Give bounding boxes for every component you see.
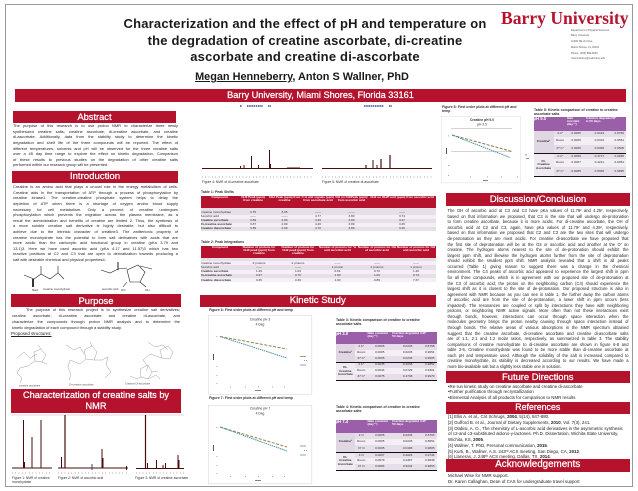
discussion text: through bonds, however, interactions can occur through space interaction when the <box>448 314 628 319</box>
chart: figure 7 first order plot: Creatine pH 7 <box>250 406 270 410</box>
table 4: kinetic comparison pH 7.4: 0.0005 <box>375 433 385 437</box>
table 3: kinetic comparison pH 3.0: 0.0005 <box>375 356 385 360</box>
kinetic study heading: Kinetic Study <box>290 295 346 306</box>
table 3: kinetic comparison pH 3.0: 0.0005 <box>375 350 385 354</box>
table 5: kinetic comparison pH 9.0: 0.0067 <box>571 160 581 164</box>
authors: Megan Henneberry, Anton S Wallner, PhD <box>195 71 409 83</box>
title: the degradation of creatine ascorbate, di-creatine <box>148 33 462 48</box>
department contact details: Miami Shores, FL 33161 <box>571 46 599 49</box>
table 2 title: Table 2: Peak Integrations <box>201 240 244 244</box>
future directions list: •Elemental Analysis of all products for comparison to NMR results <box>448 395 575 400</box>
discussion text: of ascorbic acid are from the site of de-protonation, a lower shift in ppm occurs (less <box>448 297 628 302</box>
structures: creatine monohydrate and ascorbic acid: ascorbic acid <box>102 287 119 291</box>
table 5: kinetic comparison pH 9.0: 4 C° <box>557 154 563 158</box>
heading: discussion/conclusion <box>446 193 630 206</box>
table 5: kinetic comparison pH 9.0: 0.0085 <box>571 169 581 173</box>
purpose text: kinetic degradation of each compound through a stability study. <box>12 325 122 330</box>
table 3: kinetic comparison pH 3.0: Di- <box>343 365 347 369</box>
table 4: kinetic comparison pH 7.4: 0.9848 <box>425 458 435 462</box>
discussion text: largest ppm shift, and likewise the hydrogen atoms further from the site of deprotonation <box>448 253 628 258</box>
table 3: kinetic comparison pH 3.0: 37 C° <box>357 356 365 360</box>
discussion text: based on that information we proposed that C2 and C3 are the two sites that will undergo <box>448 230 628 235</box>
table 4: kinetic comparison pH 7.4: 37 O <box>358 446 365 450</box>
table 4: kinetic comparison pH 7.4: 0.0498 <box>403 446 412 450</box>
introduction text: depletion of ATP when there is a shortage of oxygen and/or blood supply <box>13 201 178 206</box>
table 5 title: Table 5: Kinetic comparison of creatine to creatine ascorbate salts <box>534 108 618 116</box>
table 4: kinetic comparison pH 7.4: 0.0005 <box>375 439 385 443</box>
introduction text: 13.1)3. Here we have used ascorbic acid (pKa 4.17 and 11.57)3 which has two <box>13 246 178 251</box>
discussion text: are of 1:1, 2:1 and 1:2 molar ratios, respectively, as summarized in table 3. The stability <box>448 336 628 341</box>
discussion text: protons, or neighboring NMR active signals. More often than not these interactions exist <box>448 308 628 313</box>
introduction text: creatine kinase1. The creatine-creatine phosphate system helps to delay the <box>13 195 178 200</box>
structures: creatine monohydrate and ascorbic acid: creatine monohydrate <box>43 287 70 291</box>
proposed structures label: Proposed structures: <box>11 331 52 336</box>
abstract text: synthesized creatine salts; creatine ascorbate, di-creatine ascorbate, and creatine <box>13 129 178 134</box>
table 4: kinetic comparison pH 7.4: 0.0079 <box>375 458 385 462</box>
reference list: [2] Gufford B. et al., Journal of Dietary Supplements, 2010, Vol. 7(3), 241. <box>448 420 590 425</box>
introduction text: necessary for cell metabolism. Only a percent of creatine undergoes <box>13 207 178 212</box>
figure 7 title: Figure 7: First order plots at different pH and temp <box>209 396 293 400</box>
table 3: kinetic comparison pH 3.0: Ascorbate <box>338 372 353 376</box>
discussion text: should exhibit the smallest ppm shift. NMR analysis revealed that a shift in all peaks <box>448 258 628 263</box>
table 3: kinetic comparison pH 3.0: 0.0245 <box>403 356 412 360</box>
panel: future directions <box>446 371 630 400</box>
discussion text: creatine. The hydrogen atoms nearest to the site of de-protonation should exhibit the <box>448 247 628 252</box>
discussion text: table 3-6. Creatine monohydrate was found to be more stable than di-creatine ascorbate at <box>448 347 628 352</box>
table 5: kinetic comparison pH 9.0: Di- <box>542 159 546 163</box>
chart: figure 6 first order plot <box>208 315 312 394</box>
table 5: kinetic comparison pH 9.0: 0.9895 <box>615 169 624 173</box>
introduction text: salt with desirable chemical and physical properties4. <box>13 257 106 262</box>
department contact details: 11300 NE 2nd Ave <box>571 40 592 43</box>
heading: acknowledgements <box>446 459 630 472</box>
table 3: kinetic comparison pH 3.0: 0.9301 <box>425 368 435 372</box>
department contact details: Barry University <box>571 34 589 37</box>
table 5: kinetic comparison pH 9.0: 0.9951 <box>615 160 624 164</box>
reference list <box>448 414 623 459</box>
figure 8 title: Figure 8: First order plots at different pH and temp <box>442 105 516 113</box>
table 3: kinetic comparison pH 3.0: 0.9852 <box>425 362 435 366</box>
table 4: kinetic comparison pH 7.4: 0.8765 <box>425 433 435 437</box>
caption: figure 3: Figure 3: NMR of creatine ascorbate <box>135 476 188 480</box>
heading: future directions <box>446 371 630 383</box>
chart: figure 6 first order plot: 4 Deg <box>256 322 265 326</box>
discussion text: de-protonation as they are most acidic. For creatine di-ascorbate we have proposed that <box>448 236 628 241</box>
table 3: kinetic comparison pH 3.0: 0.0044 <box>375 368 385 372</box>
caption: figure 1: Figure 1: NMR of creatine <box>12 476 50 480</box>
panel: abstract <box>13 111 178 167</box>
table 3: kinetic comparison pH 3.0: Room <box>357 350 365 354</box>
table 5: kinetic comparison pH 9.0: 0.0319 <box>595 138 604 142</box>
table 4: kinetic comparison pH 7.4: 0.4026 <box>403 453 412 457</box>
heading: characterization by NMR <box>11 389 181 413</box>
affiliation banner: Barry University, Miami Shores, Florida 33161 <box>227 90 414 100</box>
purpose text: characterize the compounds through proton NMR analysis and to determine the <box>12 319 180 324</box>
heading: characterization by NMR: Characterization of creatine salts by <box>23 390 169 400</box>
introduction text: a more soluble creatine salt derivative is highly desirable, but also difficult to <box>13 223 178 228</box>
heading: abstract <box>13 111 176 123</box>
introduction text: creatine monohydrate has the potential to form salt derivatives with acids that are <box>13 235 178 240</box>
introduction text: more acidic than the carboxylic acid functional group in creatine (pKa 3.79 and <box>13 240 178 245</box>
abstract text: performed within our research group will be presented. <box>13 162 108 167</box>
table 4: kinetic comparison pH 7.4: 0.9805 <box>425 446 435 450</box>
table 5: kinetic comparison pH 9.0: 0.0319 <box>595 131 604 135</box>
spectra figures 4 and 5 <box>202 105 432 178</box>
chart: figure 8 first order plot: Creatine pH 9.0 <box>470 118 494 122</box>
discussion text <box>448 208 628 369</box>
discussion text: comparisons of creatine monohydrate to di-creatine ascorbate are shown in figure 6-8 and <box>448 342 628 347</box>
abstract text: di-ascorbate. Additionally, data from the stability study to determine the kinetic <box>13 134 178 139</box>
proposed structure diagrams <box>16 342 174 387</box>
caption: figure 4: Figure 4: NMR of di-creatine ascorbate <box>202 180 259 184</box>
title <box>124 16 486 64</box>
table 3 title: Table 3: Kinetic comparison of creatine to creatine ascorbate salts <box>336 318 420 326</box>
acknowledgements text: Dr. Karen Callaghan, Dean of CAS for undergraduate travel support <box>448 479 580 484</box>
reference list: of c2-and c3-substituted aldono-γ-lactones. Ph.D. Dissertation, Wichita State University, <box>448 431 618 436</box>
table 4: kinetic comparison pH 7.4: 0.9853 <box>425 464 435 468</box>
discussion text: based on that information we proposed, that C3 is the site that will undergo de-protonation <box>448 214 628 219</box>
table 5: kinetic comparison pH 9.0: 0.9651 <box>615 138 624 142</box>
reference list: [4] Wallner, T. PhD, Personal communication, 2015. <box>448 443 548 448</box>
table 3: kinetic comparison pH 3.0: 0.0035 <box>375 362 385 366</box>
table 5: kinetic comparison pH 9.0: 0.0495 <box>595 146 604 150</box>
table 5: kinetic comparison pH 9.0: Creatine¹ <box>537 139 550 143</box>
table 5: kinetic comparison pH 9.0: Room <box>556 160 564 164</box>
table 5: kinetic comparison pH 9.0: 0.3717 <box>595 154 604 158</box>
table 5: kinetic comparison pH 9.0: 4 C° <box>557 131 563 135</box>
table 4: kinetic comparison pH 7.4: 0.8651 <box>425 439 435 443</box>
introduction text: Creatine aids in the transportation of ATP through a process of phosphorylation by <box>13 190 178 195</box>
table 1: peak shifts <box>200 196 436 231</box>
future directions list: •Further purification through recrystallization <box>448 389 534 394</box>
table 3: kinetic comparison pH 3.0: 37 C° <box>357 374 365 378</box>
discussion text: through bonds. The relative areas of various absorptions in the NMR spectrum obtained <box>448 325 628 330</box>
caption: figure 5: Figure 5: NMR of creatine di-ascorbate <box>322 180 379 184</box>
reference list: Wichita, KS, 2005. <box>448 437 484 442</box>
abstract text: degradation and shelf life of the three compounds will be reported. The effect of <box>13 140 178 145</box>
table 4: kinetic comparison pH 7.4: 0.9734 <box>425 453 435 457</box>
abstract text: different temperatures, solvents and pH will be observed for the three creatine salts <box>13 146 178 151</box>
chart: figure 6 first order plot: Creatine pH 3 <box>250 318 270 322</box>
discussion text: each pH and temperature used. Although the solubility of the salt is increased compared to <box>448 353 628 358</box>
heading: acknowledgements: Acknowledgements <box>495 459 580 470</box>
figure 6 title: Figure 6: First order plots at different pH and temp <box>209 308 293 312</box>
introduction text <box>13 184 178 262</box>
table 4: kinetic comparison pH 7.4: 4 O <box>359 453 364 457</box>
table 3: kinetic comparison pH 3.0: 0.0729 <box>403 368 412 372</box>
table 3: kinetic comparison pH 3.0: 0.8758 <box>425 344 435 348</box>
table 3: kinetic comparison pH 3.0: 0.0075 <box>375 374 385 378</box>
table 3: kinetic comparison pH 3.0: 0.4738 <box>403 374 412 378</box>
table 5: kinetic comparison pH 9.0: Ascorbate <box>536 166 551 170</box>
caption: figure 1: monohydrate <box>12 480 31 484</box>
future directions list <box>448 384 583 400</box>
table 4: kinetic comparison pH 7.4: Creatine <box>339 458 351 462</box>
reference list: [3] Olabisi, A. O., The chemistry of L-ascorbic acid derivatives in the asymmetric synthesis <box>448 426 623 431</box>
table 4: kinetic comparison pH 7.4: 0.5242 <box>403 464 412 468</box>
table 4: kinetic comparison pH 7.4: 0.4467 <box>403 458 412 462</box>
table 3: kinetic comparison pH 3.0: 4 C° <box>358 362 364 366</box>
reference list: [1] Ellis A. et al., Crit Schrugs, 2004, 5(14), 847-880. <box>448 414 549 419</box>
table 1 title: Table 1: Peak Shifts <box>201 190 234 194</box>
table 4: kinetic comparison pH 7.4: 4 O <box>359 433 364 437</box>
discussion text: impacted). The resonances are coupled or split by interactions they have with neighboring <box>448 303 628 308</box>
table 5: kinetic comparison pH 9.0: 0.4221 <box>595 160 604 164</box>
discussion text: agreement with NMR because as you can see in table 1, the further away the carbon atoms <box>448 292 628 297</box>
reference list: [6] Llaneras, J. 248ᵗʰ ACS meeting, Dallas, TX, 2014. <box>448 454 551 459</box>
table 3: kinetic comparison pH 3.0: 0.0245 <box>403 344 412 348</box>
proposed structure diagrams: Creatine Di-ascorbate <box>125 382 151 386</box>
table 3: kinetic comparison pH 3.0: Creatine¹ <box>339 350 352 354</box>
discussion text: the C3 of ascorbic acid; the proton on the neighboring carbon (C4) should experience the <box>448 280 628 286</box>
discussion text: creatine monohydrate, its stability is decreased according to our results. We have made a <box>448 358 628 363</box>
table 3: kinetic comparison pH 3.0 <box>336 332 437 381</box>
table 5: kinetic comparison pH 9.0: 0.9505 <box>615 146 624 150</box>
table 5: kinetic comparison pH 9.0 <box>534 116 626 177</box>
table 2: peak integrations <box>200 246 436 282</box>
table 3: kinetic comparison pH 3.0: Room <box>357 368 365 372</box>
table 3: kinetic comparison pH 3.0: 0.0005 <box>375 344 385 348</box>
abstract text: The purpose of this research is to use proton NMR to characterize three newly <box>13 123 178 128</box>
title: Characterization and the effect of pH and temperature on <box>124 16 486 31</box>
proposed structure diagrams: Di-creatine ascorbate <box>69 382 94 386</box>
table 4: kinetic comparison pH 7.4: 0.0067 <box>375 453 385 457</box>
table 4: kinetic comparison pH 7.4: Room <box>357 439 365 443</box>
panel: acknowledgements <box>446 459 630 484</box>
table 5: kinetic comparison pH 9.0: 0.0059 <box>571 154 581 158</box>
purpose text: creatine ascorbate, di-creatine ascorbate and creatine di-ascorbate, and <box>12 313 180 318</box>
kinetic study heading <box>200 295 436 307</box>
discussion text: ascorbic acid at C2 and C3, again, have pKa values of 11.79² and 4.25², respectively, <box>448 225 628 230</box>
table 3: kinetic comparison pH 3.0: 0.9505 <box>425 356 435 360</box>
introduction text: phosphorylation which prevents the migration across the plasma membrane, as a <box>13 212 178 217</box>
table 3: kinetic comparison pH 3.0: Creatine <box>339 369 351 373</box>
discussion text: environment. The C4 peaks of ascorbic acid appeared to experience the largest shift in ppm <box>448 269 628 274</box>
panel: purpose <box>11 294 181 387</box>
table 4: kinetic comparison pH 7.4: Room <box>357 458 365 462</box>
discussion text: occurred (Table 1) giving reason to suggest there was a change in the chemical <box>448 264 628 269</box>
discussion text: The OH of ascorbic acid at C3 and C3 have pKa values of 11.79² and 4.25², respectively, <box>448 208 628 213</box>
discussion text: suggest that the creatine ascorbate, di-creatine ascorbate and creatine di-ascorbate salts <box>448 331 628 336</box>
introduction text: result the administration and benefits of creatine are limited 2. Thus, the synthesis of <box>13 218 178 223</box>
table 4: kinetic comparison pH 7.4: 37 O <box>358 464 365 468</box>
discussion text: to form creatine ascorbate, because it is more acidic. For di-creatine ascorbate, the OH of <box>448 219 628 224</box>
heading: characterization by NMR: NMR <box>86 401 106 411</box>
discussion text: the first site of deprotonation will be at the O3 or ascorbic acid and another at the O' on <box>448 242 628 247</box>
heading: references <box>446 402 630 414</box>
table 4: kinetic comparison pH 7.4 <box>336 420 437 471</box>
abstract text <box>13 123 178 167</box>
heading: discussion/conclusion: Discussion/Conclusion <box>490 194 586 205</box>
discussion text: largest shift as it is closest to the site of de-protonation. Our proposed structure is also in <box>448 286 628 291</box>
table 3: kinetic comparison pH 3.0: 0.9651 <box>425 350 435 354</box>
discussion text: molecules geometry brings the proton nearby causing through space interaction instead of <box>448 319 628 324</box>
purpose text <box>12 307 180 330</box>
table 4: kinetic comparison pH 7.4: 0.0084 <box>375 464 385 468</box>
heading: introduction <box>12 171 178 183</box>
table 5: kinetic comparison pH 9.0: 37 C° <box>556 146 564 150</box>
chart: figure 8 first order plot <box>441 116 529 183</box>
department contact details: mhenneberry@mail.barry.edu <box>571 57 605 60</box>
affiliation banner <box>15 89 626 102</box>
panel: introduction <box>12 171 178 291</box>
heading: abstract: Abstract <box>77 112 112 122</box>
purpose text: The purpose of this research project is to synthesize creatine salt derivatives; <box>26 307 180 312</box>
logo: Barry University: Barry University <box>501 8 629 28</box>
table 5: kinetic comparison pH 9.0: 0.0005 <box>571 131 581 135</box>
introduction text: Creatine is an amino acid that plays a crucial role in the energy metabolism of cells. <box>13 184 178 189</box>
table 3: kinetic comparison pH 3.0: 0.0245 <box>403 350 412 354</box>
department contact details <box>571 28 609 60</box>
chart: figure 7 first order plot: 4 Deg <box>256 412 265 416</box>
table 5: kinetic comparison pH 9.0: 0.0005 <box>571 146 581 150</box>
table 4: kinetic comparison pH 7.4: Creatine¹ <box>339 439 352 443</box>
table 3: kinetic comparison pH 3.0: 0.2038 <box>403 362 412 366</box>
table 4: kinetic comparison pH 7.4: Ascorbate <box>338 462 353 466</box>
heading: purpose <box>11 294 181 307</box>
caption: figure 1 <box>12 476 50 484</box>
introduction text: achieve due to the intrinsic character of creatine3. The zwitterionic property of <box>13 229 178 234</box>
heading: references: References <box>515 402 560 412</box>
department contact details: Phone: (305) 899-3000 <box>571 52 598 55</box>
heading: future directions: Future Directions <box>502 371 573 382</box>
discussion text: more bio-available salt but a slightly less stable one in solution. <box>448 364 562 369</box>
table 3: kinetic comparison pH 3.0: 4 C° <box>358 344 364 348</box>
panel: characterization by NMR <box>11 389 188 484</box>
table 5: kinetic comparison pH 9.0: 0.9935 <box>615 154 624 158</box>
table 4: kinetic comparison pH 7.4: 0.0245 <box>403 439 412 443</box>
table 5: kinetic comparison pH 9.0: 37 C° <box>556 169 564 173</box>
caption: figure 2: Figure 2: NMR of ascorbic acid <box>58 476 103 480</box>
abstract text: of these results to previous studies on the degradation of other creatine salts <box>13 157 178 162</box>
reference list: [5] Kurti, B., Wallner, A.S. 243ʳᵈ ACS meeting, San Diego, CA, 2012. <box>448 449 580 454</box>
chart: figure 8 first order plot: pH 3.5 <box>477 122 487 126</box>
acknowledgements text: Michael Wise for NMR support. <box>448 472 509 478</box>
future directions list: •Re-run kinetic study on creatine ascorbate and creatine di-ascorbate <box>448 384 583 388</box>
table 4: kinetic comparison pH 7.4: Di- <box>343 455 347 459</box>
table 3: kinetic comparison pH 3.0: 0.9970 <box>425 374 435 378</box>
title: ascorbate and creatine di-ascorbate <box>190 49 420 64</box>
department contact details: Department of Physical Sciences <box>571 28 609 32</box>
heading: introduction: Introduction <box>70 171 120 182</box>
chart: figure 7 first order plot <box>208 405 312 484</box>
abstract text: over a 45 day time range to explore the effect on kinetic degradation. Comparison <box>13 151 178 156</box>
heading: purpose: Purpose <box>79 295 113 306</box>
spectra figures 1-3 <box>11 414 184 474</box>
table 5: kinetic comparison pH 9.0: 0.0005 <box>571 138 581 142</box>
table 4: kinetic comparison pH 7.4: 0.0005 <box>375 446 385 450</box>
table 5: kinetic comparison pH 9.0: 0.5365 <box>595 169 604 173</box>
introduction text: reactive positions at C2 and C3 that are open to derivatization towards producing a <box>13 251 178 256</box>
acknowledgements text <box>448 472 580 484</box>
table 5: kinetic comparison pH 9.0: Room <box>556 138 564 142</box>
discussion text: for all three compounds, which is in agreement with our proposed site of de-protonation at <box>448 275 628 280</box>
panel: references <box>446 402 630 459</box>
table 5: kinetic comparison pH 9.0: 0.8760 <box>615 131 624 135</box>
table 4: kinetic comparison pH 7.4: 0.0245 <box>403 433 412 437</box>
structures: creatine monohydrate and ascorbic acid <box>24 262 152 291</box>
table 5: kinetic comparison pH 9.0: Creatine <box>537 162 550 166</box>
table 4 title: Table 4: Kinetic comparison of creatine to creatine ascorbate salts <box>336 405 420 413</box>
panel: discussion and conclusion <box>446 193 630 369</box>
